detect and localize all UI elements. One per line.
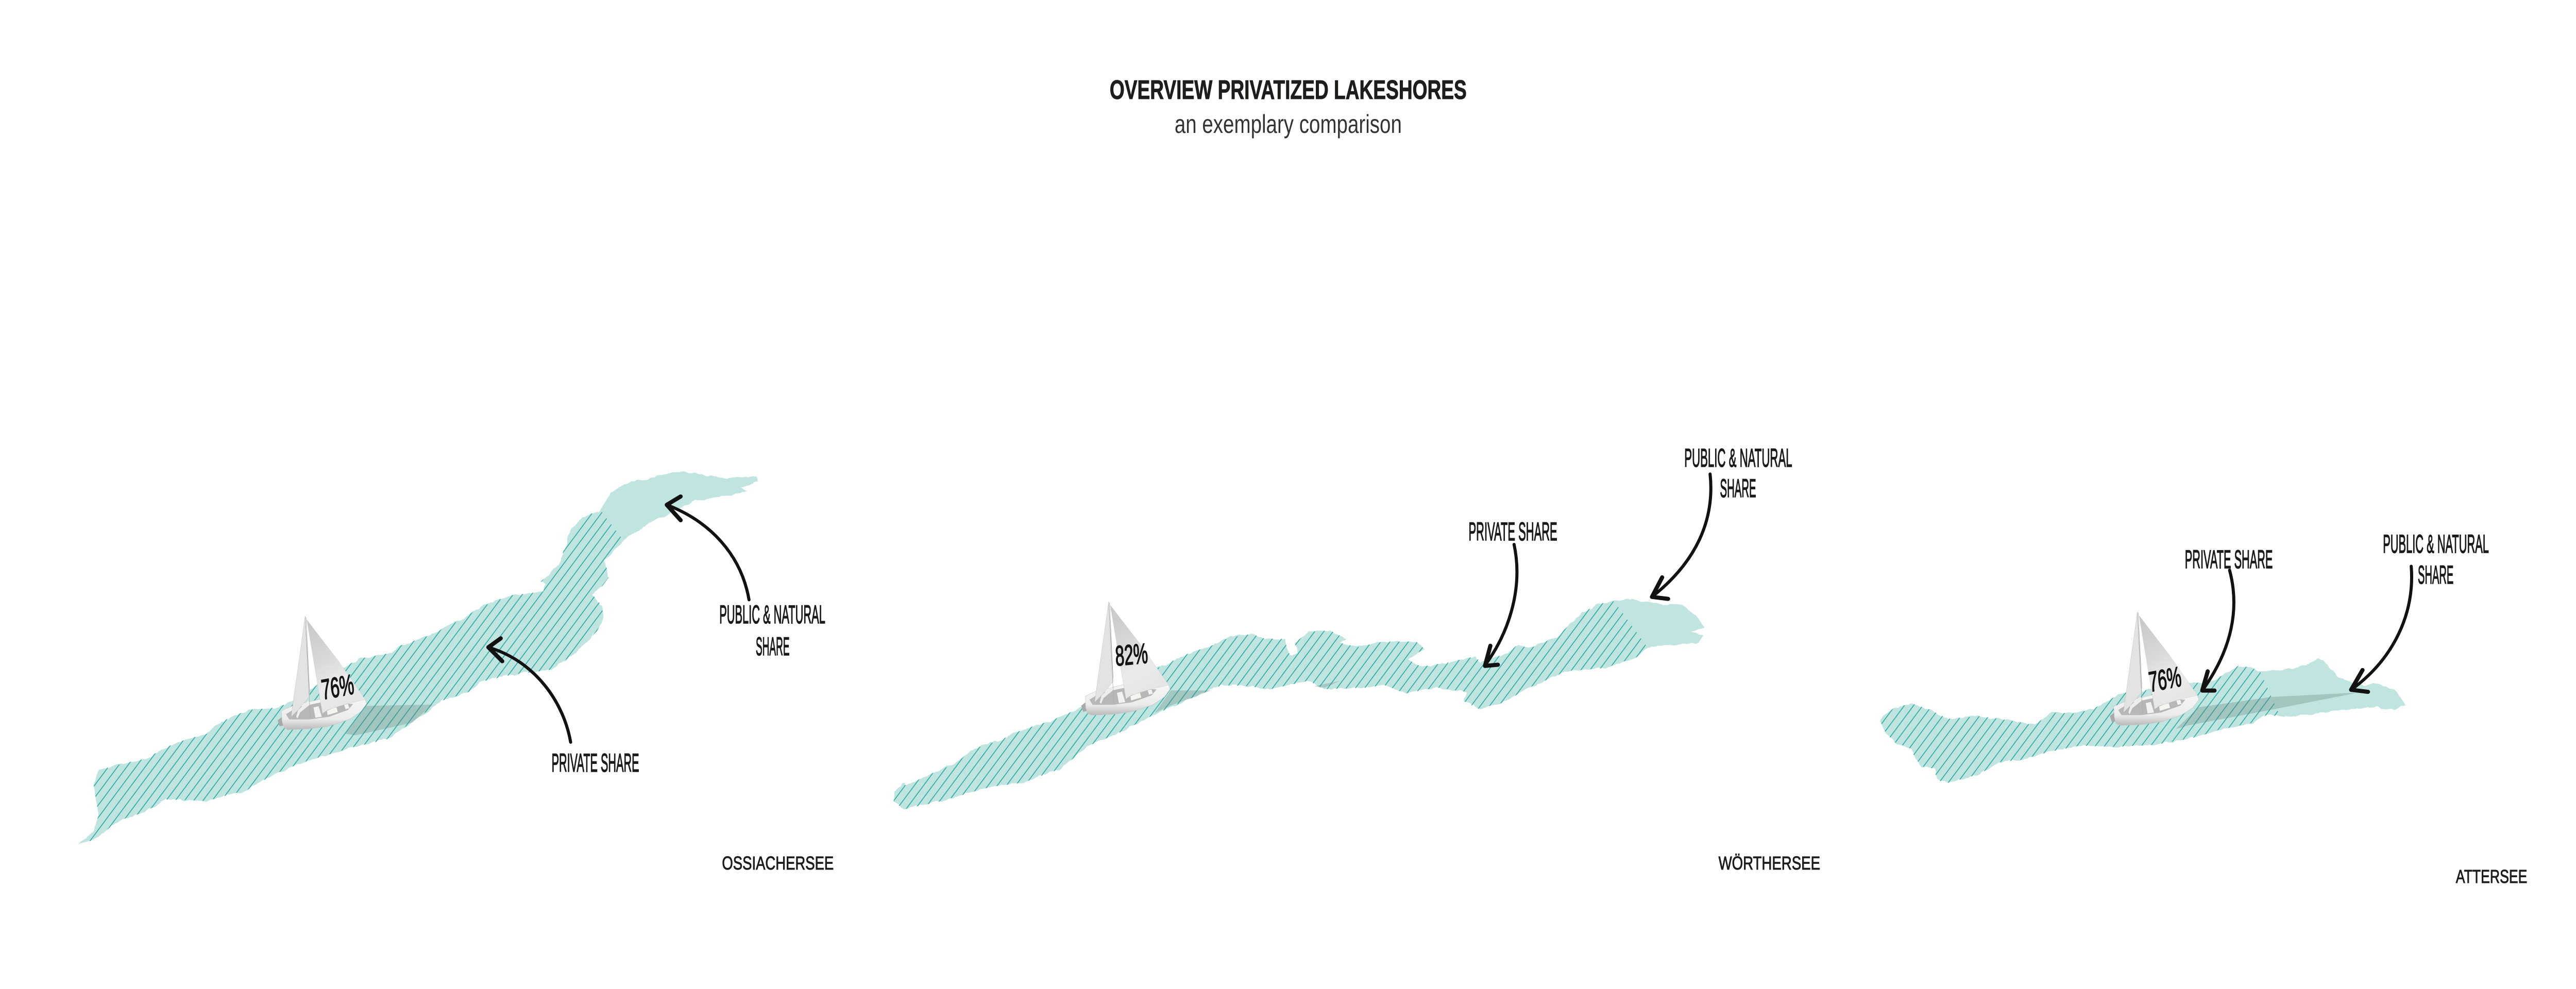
- boat shadow: [1155, 680, 1341, 713]
- lake name: WÖRTHERSEE: [1719, 852, 1820, 874]
- arrow: public and natural share: [1652, 474, 1711, 599]
- label: public and natural share: SHARE: [756, 633, 790, 661]
- label: public and natural share: [2383, 530, 2489, 589]
- panel: Attersee: [1861, 530, 2527, 887]
- panel: Ossiachersee: [78, 471, 834, 870]
- private share hatching: [1882, 665, 2278, 783]
- private share hatching: [89, 512, 621, 842]
- label: private share: PRIVATE SHARE: [1469, 518, 1557, 546]
- subtitle: an exemplary comparison: [1175, 110, 1402, 139]
- title: OVERVIEW PRIVATIZED LAKESHORES: [1110, 74, 1467, 105]
- boat shadow: [2176, 693, 2358, 729]
- icon: sailboat with 82 percent: [1081, 602, 1170, 715]
- arrow: private share: [2202, 570, 2234, 691]
- icon: sailboat with 82 percent: 82%: [1114, 638, 1148, 672]
- lake name: OSSIACHERSEE: [722, 852, 834, 874]
- label: private share: PRIVATE SHARE: [2185, 545, 2273, 574]
- label: public and natural share: [719, 601, 825, 661]
- lake shape: Wörthersee: [894, 599, 1704, 809]
- arrow: private share: [1485, 544, 1517, 666]
- lake shape: Attersee: [1880, 659, 2406, 783]
- label: public and natural share: [1684, 444, 1792, 503]
- lake name: ATTERSEE: [2456, 866, 2527, 887]
- label: public and natural share: PUBLIC & NATURAL: [719, 601, 825, 629]
- icon: sailboat with 76 percent: [278, 617, 367, 730]
- private share hatching: [893, 601, 1646, 809]
- label: public and natural share: PUBLIC & NATURAL: [2383, 530, 2489, 558]
- label: public and natural share: SHARE: [1720, 474, 1756, 503]
- arrow: public and natural share: [2351, 566, 2412, 692]
- panel: Wörthersee: [883, 444, 1820, 876]
- icon: sailboat with 76 percent: 76%: [320, 669, 355, 706]
- boat shadow: [346, 705, 433, 735]
- page: [78, 80, 2527, 883]
- icon: sailboat with 76 percent: [2110, 612, 2199, 725]
- label: public and natural share: SHARE: [2418, 561, 2453, 589]
- arrow: private share: [488, 638, 571, 742]
- label: public and natural share: PUBLIC & NATURAL: [1684, 444, 1792, 472]
- lake shape: Ossiachersee: [79, 471, 758, 844]
- icon: sailboat with 76 percent: 76%: [2147, 661, 2183, 698]
- arrow: public and natural share: [667, 497, 749, 600]
- label: private share: PRIVATE SHARE: [552, 749, 639, 777]
